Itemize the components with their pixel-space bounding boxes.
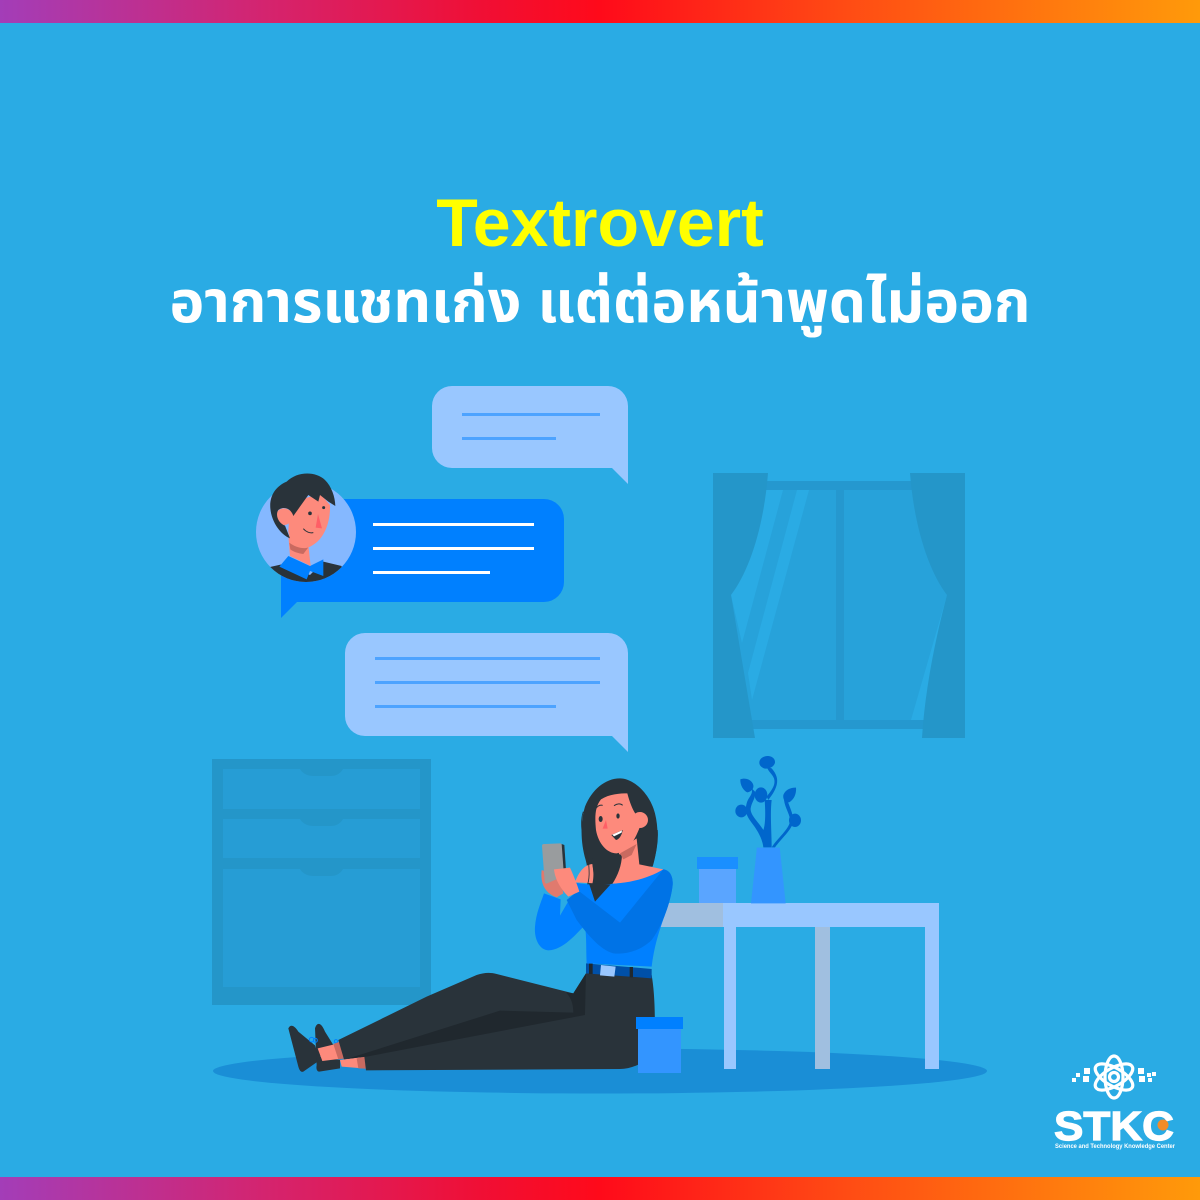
woman: upper body [535, 778, 673, 978]
face [595, 793, 640, 853]
belt [586, 963, 652, 978]
chat bubble: bottom [345, 633, 628, 752]
eyebrows [595, 804, 623, 809]
logo: wordmark: STKC [1054, 1103, 1174, 1149]
neck shadow [620, 844, 637, 859]
cup on table [697, 857, 738, 903]
logo: pixel squares [1072, 1068, 1156, 1082]
icon: man avatar [256, 474, 356, 587]
front arm [567, 869, 673, 954]
stray hair strands [582, 812, 657, 887]
mouth [611, 830, 623, 840]
hair back [582, 778, 658, 902]
shoulders and neck [575, 838, 663, 884]
box on floor [636, 1017, 683, 1073]
dresser [212, 759, 431, 1005]
window [713, 473, 965, 738]
nose [603, 820, 608, 829]
logo: STKC [1054, 1056, 1176, 1150]
hair front lock [588, 848, 622, 902]
floor shadow [213, 1048, 987, 1094]
woman: legs [288, 973, 655, 1072]
hair lock over sweater [589, 883, 611, 902]
logo: tagline: Science and Technology Knowledge Center [1055, 1144, 1176, 1150]
eyes [599, 813, 620, 822]
chat bubble: top [432, 386, 628, 484]
bottom gradient bar [0, 1177, 1200, 1200]
logo: atom icon [1091, 1056, 1137, 1098]
hand and phone [541, 870, 563, 897]
plant in vase [735, 756, 801, 903]
ear [632, 812, 648, 828]
sweater [575, 869, 673, 967]
subtitle: อาการแชทเก่ง แต่ต่อหน้าพูดไม่ออก [169, 270, 1031, 335]
left sleeve [535, 893, 585, 950]
illustration [212, 386, 1175, 1150]
logo: orange dot [1158, 1120, 1168, 1130]
title: Textrovert: Textrovert [436, 185, 764, 261]
title [169, 185, 1031, 338]
top gradient bar [0, 0, 1200, 23]
chat bubble: middle [281, 499, 564, 618]
side table [655, 903, 939, 1069]
